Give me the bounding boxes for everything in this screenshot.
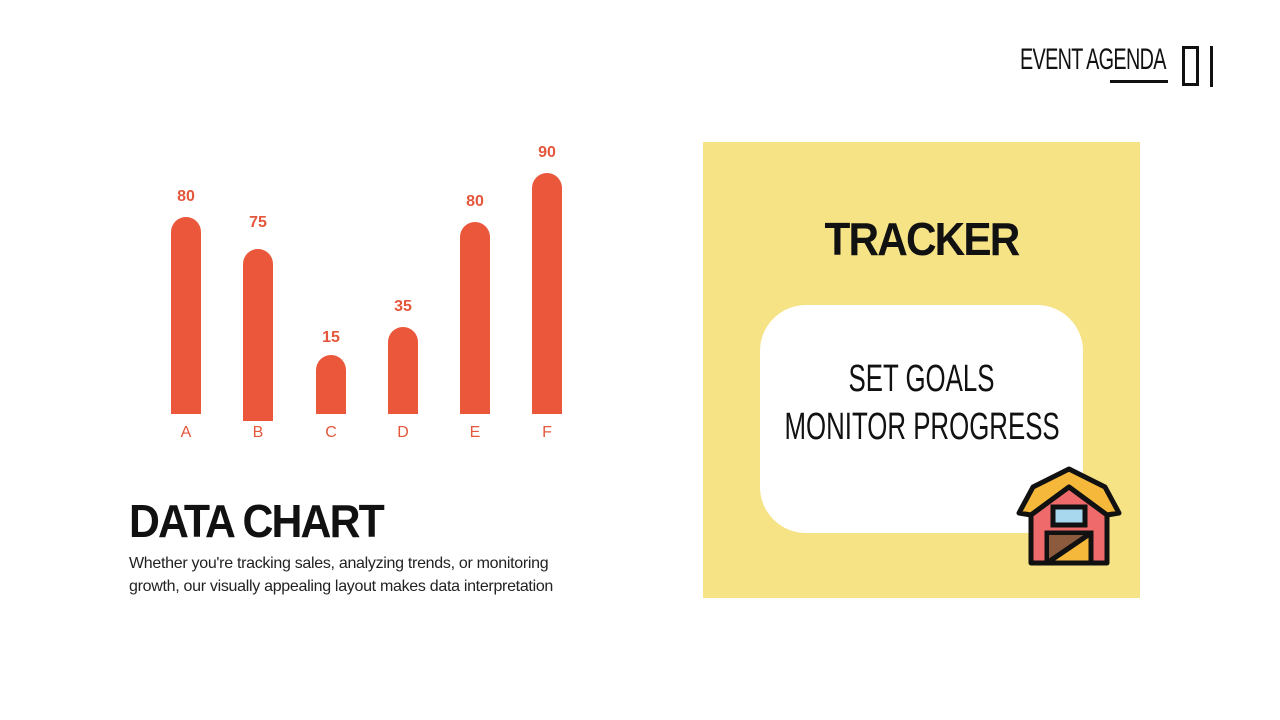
white card [760,305,1083,533]
bar chart: 75 [249,214,267,231]
bar chart: 80 [466,193,484,210]
bar A [171,217,201,414]
tracker heading: TRACKER [824,213,1019,265]
bar D [388,327,418,414]
bar chart: 80 [177,188,195,205]
number 01 [1182,46,1199,86]
x labels: A [181,424,191,441]
card text [784,358,1060,448]
bar chart: 15 [322,329,340,346]
bar E [460,222,490,414]
bar B [243,249,273,421]
bar chart: E [470,424,480,441]
icon: barn [1016,466,1122,566]
underline [1110,80,1168,83]
header: event agenda [1020,43,1213,87]
bar chart: 90 [538,144,556,161]
header text: EVENT AGENDA [1020,43,1166,76]
panel: tracker [703,142,1140,598]
bar F [532,173,562,414]
card text: SET GOALS [848,358,995,400]
bar chart [171,144,562,441]
bar chart: F [542,424,552,441]
bar chart: C [325,424,337,441]
description text: Whether you're tracking sales, analyzing trends, or monitoring growth, our visually appealing layout makes data interpretation [129,555,553,595]
bar chart: B [253,424,263,441]
bar chart: 35 [394,298,412,315]
card text: MONITOR PROGRESS [784,406,1060,448]
title: data chart: DATA CHART [129,495,383,547]
bar C [316,355,346,414]
bar chart: D [397,424,409,441]
